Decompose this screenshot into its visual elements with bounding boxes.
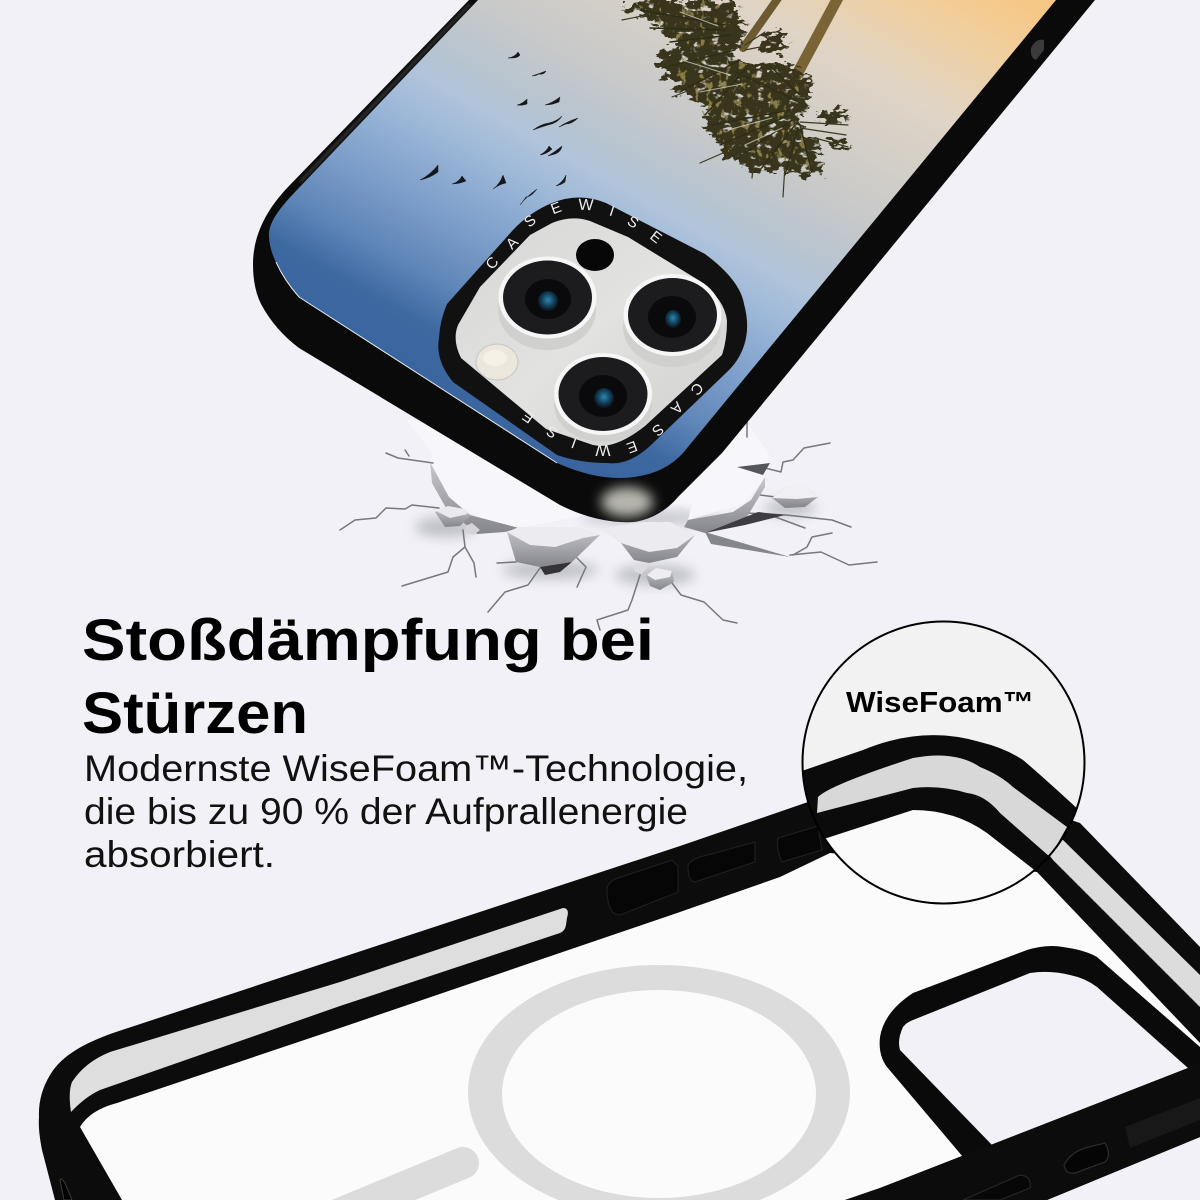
- lower band: [845, 1063, 1200, 1200]
- brand lettering bottom: C: [687, 379, 707, 398]
- back panel: [269, 0, 1056, 478]
- heading: Stürzen: [82, 681, 308, 746]
- magnifier label: WiseFoam™: [846, 687, 1034, 719]
- palm loose fronds: [622, 15, 848, 197]
- frame highlight: [300, 4, 470, 182]
- lower phone case, inside view: [39, 767, 1200, 1200]
- magnified panel: [790, 810, 1060, 920]
- brand lettering top: W: [578, 197, 595, 214]
- brand lettering top: C: [482, 254, 502, 273]
- palm radiating fronds: [640, 10, 812, 175]
- camera cutout: [899, 972, 1188, 1145]
- right plate edge: [684, 477, 765, 533]
- side button: [1031, 40, 1044, 60]
- brand lettering top: A: [503, 234, 522, 253]
- crack shadows: [415, 500, 816, 585]
- microphone hole: [576, 239, 614, 271]
- side buttons: [607, 826, 822, 915]
- rock: small lower: [632, 563, 674, 590]
- magnifier callout: [802, 620, 1086, 904]
- artwork: palms and birds: [420, 0, 848, 205]
- magsafe ring: [468, 965, 850, 1200]
- magnified edge: [804, 735, 1076, 870]
- palm trunks: [743, 0, 840, 78]
- lower band ports: [963, 1098, 1200, 1200]
- flash: [476, 344, 518, 380]
- top phone with case: [253, 0, 1095, 522]
- brand lettering top: E: [647, 228, 665, 247]
- magnified band: [804, 735, 1076, 870]
- birds: [420, 52, 578, 205]
- body text: Modernste WiseFoam™-Technologie,: [84, 748, 748, 789]
- brand lettering bottom: A: [667, 398, 686, 417]
- rock: centre left: [507, 527, 600, 575]
- brand lettering bottom: W: [595, 441, 611, 458]
- magsafe alignment bar: [330, 1163, 463, 1200]
- body text: die bis zu 90 % der Aufprallenergie: [84, 791, 688, 832]
- lens 3: [554, 353, 652, 442]
- lens 2: [623, 274, 722, 367]
- long wedge: [705, 532, 790, 557]
- crack lines: [340, 420, 877, 630]
- left plate edge: [430, 462, 519, 534]
- rock: small right: [772, 485, 818, 508]
- camera cutout band: [880, 946, 1200, 1157]
- camera island: [438, 197, 747, 463]
- foam window left: [70, 908, 568, 1112]
- brand lettering bottom: E: [624, 437, 639, 456]
- palm crown light: [640, 4, 815, 170]
- magnifier fill: [802, 622, 1084, 904]
- camera plateau: [456, 218, 727, 446]
- magnifier outline: [802, 622, 1084, 904]
- illustration: cracked ground: [340, 420, 877, 630]
- brand lettering bottom: E: [519, 407, 537, 426]
- lens 1: [498, 256, 596, 350]
- brand lettering bottom: S: [648, 420, 667, 439]
- case frame: [253, 0, 1095, 522]
- brand lettering bottom: I: [569, 434, 579, 451]
- foam window right: [1030, 830, 1200, 1007]
- body text: absorbiert.: [84, 834, 275, 875]
- case frame: [39, 767, 1200, 1200]
- dark wedge: [737, 463, 770, 475]
- brand lettering bottom: [519, 379, 707, 458]
- rock: small left: [435, 506, 480, 535]
- body text: [84, 748, 748, 875]
- island frame: [438, 198, 747, 463]
- brand lettering top: S: [624, 213, 641, 232]
- brand lettering top: S: [521, 212, 540, 231]
- bottom corner sheen: [601, 487, 653, 517]
- lifted ground plate: [407, 420, 769, 528]
- brand lettering top: I: [607, 203, 616, 220]
- left port: [60, 1179, 72, 1200]
- panel edge highlight: [276, 262, 557, 463]
- heading: Stoßdämpfung bei: [82, 608, 654, 673]
- palm pale gaps: [680, 12, 782, 145]
- brand lettering top: [482, 197, 665, 273]
- heading: [82, 608, 654, 746]
- magnified foam: [817, 755, 1067, 857]
- right plate: [688, 437, 769, 520]
- palm crown dark: [620, 0, 848, 175]
- clear back panel: [80, 853, 1200, 1200]
- brand lettering bottom: S: [544, 422, 561, 441]
- rock: centre right: [602, 522, 695, 563]
- brand lettering top: E: [549, 199, 564, 218]
- dark gap: [705, 512, 785, 533]
